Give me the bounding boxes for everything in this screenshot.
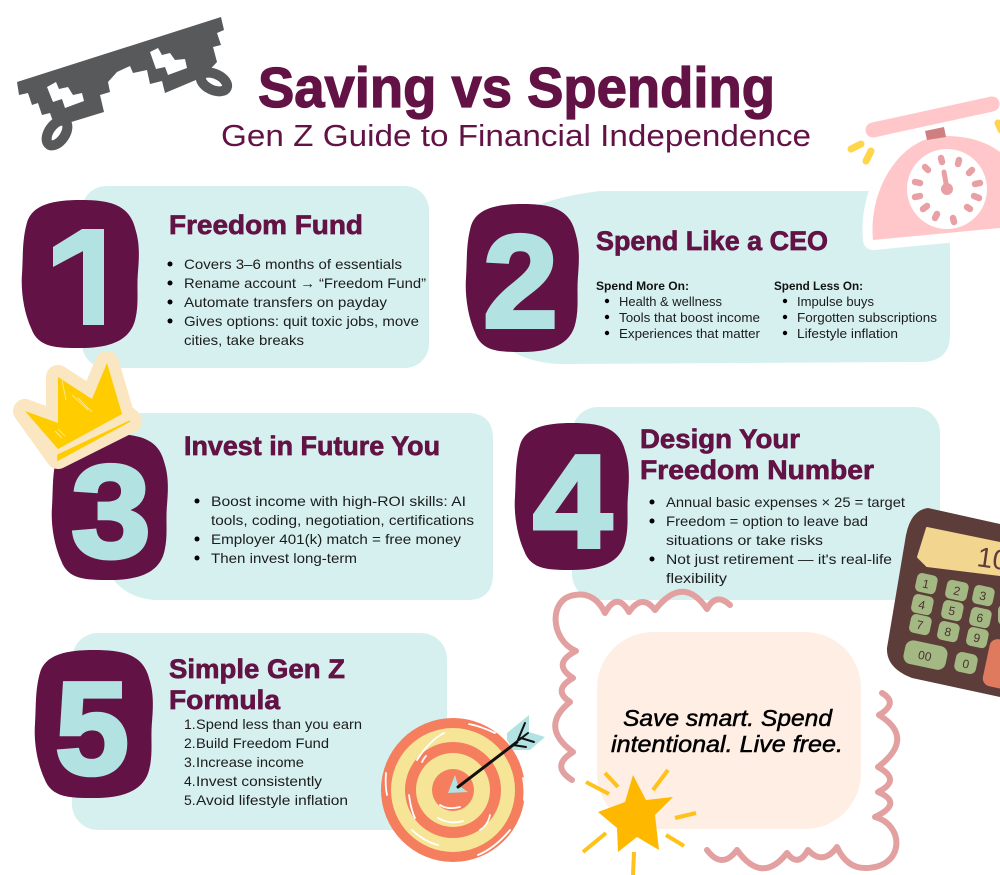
- icon: gold star: [583, 770, 696, 875]
- bullet list: Boost income with high-ROI skills: AI: [211, 493, 466, 509]
- icon: calculator: 1: [921, 576, 931, 592]
- number blob 2: 2: [483, 208, 558, 355]
- numbered list: Increase income: [196, 754, 304, 770]
- numbered list: 2.: [184, 735, 196, 751]
- number blob 3: [52, 434, 168, 585]
- icon: calculator: 3: [978, 588, 988, 604]
- number blob 1: 1: [46, 206, 126, 353]
- number blob 5: [35, 650, 153, 802]
- numbered list: Avoid lifestyle inflation: [196, 792, 348, 808]
- panel background: [572, 407, 940, 600]
- panel background: [110, 413, 493, 600]
- bullet list: tools, coding, negotiation, certifications: [211, 512, 474, 528]
- subtitle: Gen Z Guide to Financial Independence: [221, 118, 811, 153]
- icon: target with arrow: [381, 715, 545, 862]
- icon: calculator: 00: [917, 648, 933, 664]
- number blob 5: 5: [55, 655, 129, 802]
- heading: Formula: [169, 685, 281, 715]
- callout: quote box: Save smart. Spend: [623, 705, 833, 731]
- icon: crown: [25, 363, 130, 460]
- icon: pixel sunglasses: [17, 17, 230, 149]
- panel: 3 Invest in Future You: [52, 413, 493, 600]
- column: spend less: [774, 281, 937, 341]
- bullet list: Not just retirement — it's real-life: [666, 551, 892, 567]
- panel: 2 Spend Like a CEO: [466, 191, 950, 364]
- icon: calculator: 5: [947, 603, 957, 619]
- numbered list: 5.: [184, 792, 196, 808]
- bullet list: Gives options: quit toxic jobs, move: [184, 313, 419, 329]
- bullet list: flexibility: [666, 570, 727, 586]
- numbered list: 1.: [184, 716, 196, 732]
- icon: calculator: 2: [952, 583, 962, 599]
- icon: pink kitchen scale: [851, 104, 1000, 240]
- panel background: [500, 191, 950, 364]
- icon: calculator: 8: [943, 624, 953, 640]
- numbered list: 4.: [184, 773, 196, 789]
- panel background: [72, 633, 447, 830]
- numbered list: [184, 716, 362, 808]
- bullet list: Then invest long-term: [211, 550, 357, 566]
- numbered list: Invest consistently: [196, 773, 322, 789]
- numbered list: Build Freedom Fund: [196, 735, 329, 751]
- number blob 4: [515, 423, 629, 575]
- number blob 1: [22, 200, 139, 353]
- bullet list: cities, take breaks: [184, 332, 304, 348]
- icon: calculator: 9: [972, 630, 982, 646]
- column: spend more: [596, 281, 760, 341]
- bullet list: [194, 493, 474, 566]
- column: spend more: Experiences that matter: [619, 327, 760, 341]
- icon: calculator: 4: [917, 597, 927, 613]
- bullet list: [650, 494, 905, 586]
- panel background: [82, 186, 429, 368]
- title: Saving vs Spending: [258, 56, 775, 120]
- bullet list: Employer 401(k) match = free money: [211, 531, 461, 547]
- icon: calculator: 0: [961, 656, 971, 672]
- column: spend less: Forgotten subscriptions: [797, 311, 937, 325]
- heading: Invest in Future You: [184, 431, 440, 461]
- column: spend more: Spend More On:: [596, 281, 689, 293]
- column: spend more: Tools that boost income: [619, 311, 760, 325]
- number blob 2: [466, 204, 579, 355]
- column: spend less: Spend Less On:: [774, 281, 863, 293]
- heading: Freedom Fund: [169, 210, 363, 240]
- column: spend more: Health & wellness: [619, 295, 722, 309]
- numbered list: Spend less than you earn: [196, 716, 362, 732]
- bullet list: Annual basic expenses × 25 = target: [666, 494, 905, 510]
- panel: 5 Simple Gen Z Formula: [35, 633, 447, 830]
- callout: quote box: intentional. Live free.: [611, 731, 843, 757]
- number blob 4: 4: [533, 428, 612, 575]
- bullet list: Automate transfers on payday: [184, 294, 387, 310]
- column: spend less: Lifestyle inflation: [797, 327, 898, 341]
- heading: Simple Gen Z: [169, 654, 345, 684]
- bullet list: Rename account → “Freedom Fund”: [184, 275, 426, 291]
- heading: Design Your: [640, 424, 801, 454]
- heading: Spend Like a CEO: [596, 226, 828, 256]
- column: spend less: Impulse buys: [797, 295, 874, 309]
- icon: calculator: 6: [975, 610, 985, 626]
- number blob 3: 3: [71, 438, 151, 585]
- numbered list: 3.: [184, 754, 196, 770]
- panel: 1 Freedom Fund: [22, 186, 429, 368]
- heading: [169, 654, 345, 715]
- heading: [640, 424, 875, 485]
- bullet list: [168, 256, 426, 348]
- bullet list: situations or take risks: [666, 532, 823, 548]
- icon: calculator: [887, 508, 1000, 697]
- decorative squiggle frame: [555, 592, 897, 868]
- callout: quote box: [597, 632, 861, 829]
- bullet list: Freedom = option to leave bad: [666, 513, 868, 529]
- heading: Freedom Number: [640, 455, 875, 485]
- bullet list: Covers 3–6 months of essentials: [184, 256, 402, 272]
- icon: calculator: 7: [915, 617, 925, 633]
- panel: 4 Design Your Freedom Number: [515, 407, 940, 600]
